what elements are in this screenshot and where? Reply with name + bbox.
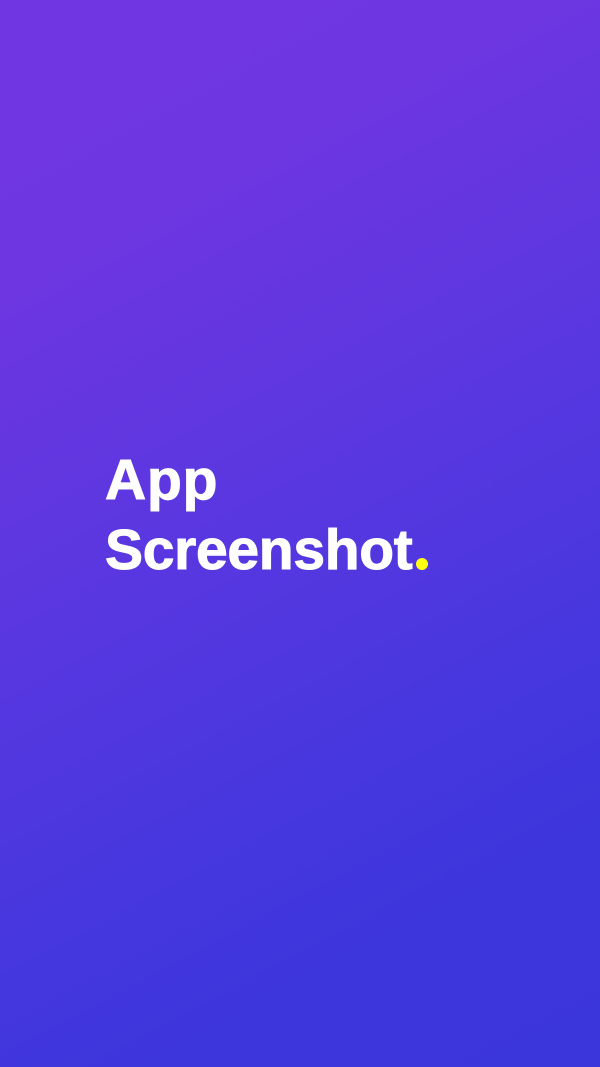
title line: App: App (105, 448, 218, 512)
title line: Screenshot: Screenshot (105, 518, 412, 582)
title: App Screenshot (105, 448, 428, 582)
yellow period dot (416, 558, 428, 570)
